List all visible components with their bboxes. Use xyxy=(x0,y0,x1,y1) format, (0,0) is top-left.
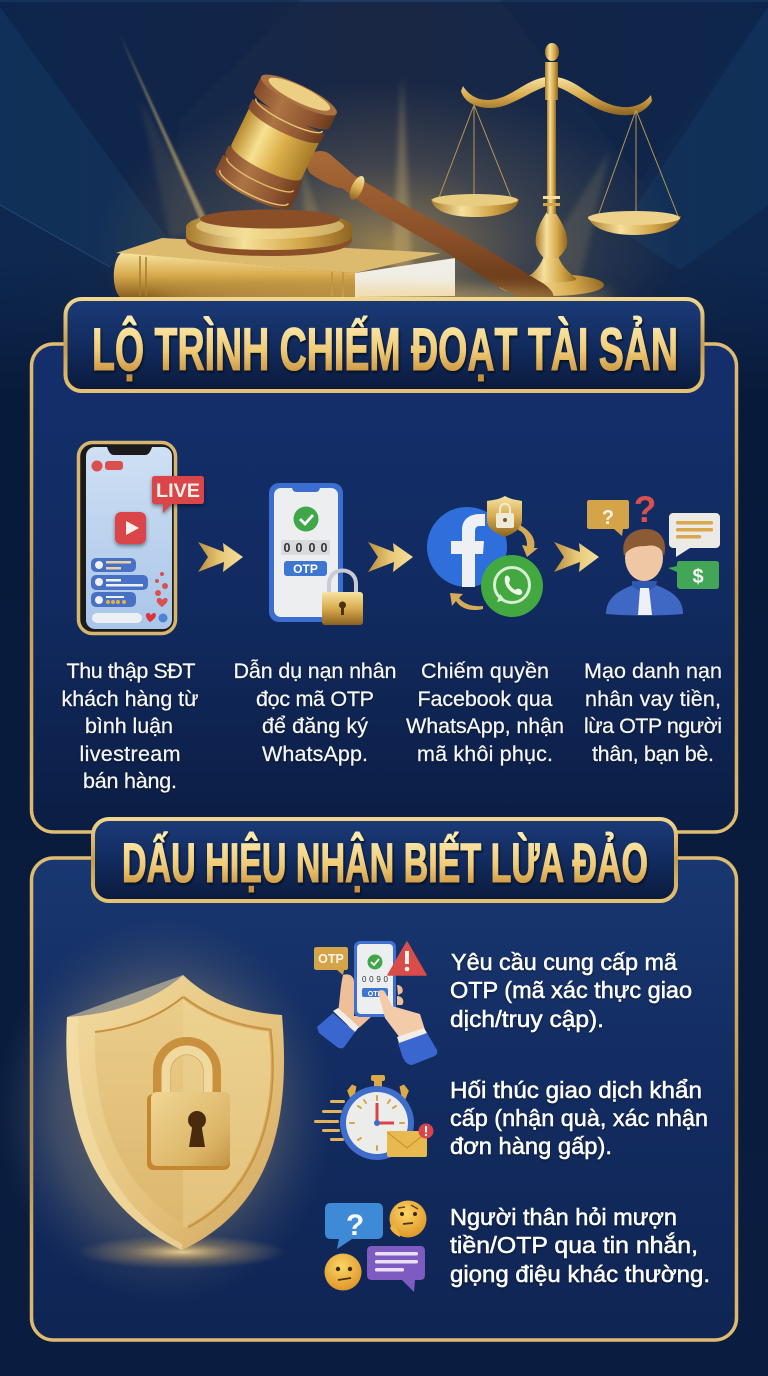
step 2 text: để đăng ký xyxy=(262,714,368,738)
heading banner: route xyxy=(66,288,702,391)
illustration: scales of justice xyxy=(431,43,681,296)
icon: OTP phone with padlock: 0 xyxy=(284,541,291,555)
gavel striker block xyxy=(186,210,352,256)
icon: hands holding OTP phone xyxy=(314,941,437,1065)
illustration: gavel xyxy=(186,68,553,297)
icon: hands holding OTP phone: 0 0 9 0 xyxy=(362,975,389,984)
step 3 text: Chiếm quyền xyxy=(421,659,549,683)
step 1 text xyxy=(62,659,198,793)
panel: route xyxy=(32,344,736,832)
heading banner: signs xyxy=(93,819,676,901)
icon: Facebook and WhatsApp takeover xyxy=(427,496,543,617)
icon: chat bubbles and emoji xyxy=(324,1200,426,1292)
text: relatives asking: Người thân hỏi mượn xyxy=(450,1204,677,1230)
gavel handle xyxy=(307,151,553,297)
arrow 1 xyxy=(198,542,243,572)
step 3 text xyxy=(406,659,564,766)
badge: LIVE xyxy=(152,476,204,513)
text: urgency: Hối thúc giao dịch khẩn xyxy=(450,1077,702,1103)
step 4 text: lừa OTP người xyxy=(584,714,722,738)
icon: chat bubbles and emoji: ? xyxy=(346,1209,364,1242)
step 1 text: Thu thập SĐT xyxy=(66,659,196,683)
step 1 text: livestream xyxy=(80,742,180,766)
step 3 text: mã khôi phục. xyxy=(417,742,553,766)
arrow 2 xyxy=(368,542,413,572)
text: OTP request xyxy=(450,949,692,1032)
text: relatives asking xyxy=(450,1204,710,1287)
icon: impersonation person with bubbles xyxy=(587,489,720,616)
icon: OTP phone with padlock: OTP xyxy=(293,562,318,576)
icon: red question mark: ? xyxy=(634,489,656,530)
step 3 text: WhatsApp, nhận xyxy=(406,714,564,738)
icon: warning triangle xyxy=(388,942,426,975)
step 1 text: khách hàng từ xyxy=(62,687,198,711)
panel: signs xyxy=(32,858,736,1340)
bubble: OTP: OTP xyxy=(318,952,344,966)
step 2 text xyxy=(234,658,396,766)
icon: hands holding OTP phone: OTP xyxy=(368,991,383,998)
text: OTP request: Yêu cầu cung cấp mã xyxy=(451,949,677,975)
bubble: message xyxy=(669,513,720,557)
icon: golden shield with padlock xyxy=(0,915,335,1305)
text: urgency: đơn hàng gấp). xyxy=(450,1133,612,1159)
step 2 text: đọc mã OTP xyxy=(256,687,374,711)
text: relatives asking: giọng điệu khác thường. xyxy=(450,1261,710,1287)
gavel head xyxy=(211,68,341,216)
badge: LIVE: LIVE xyxy=(156,481,200,502)
step 4 text: thân, bạn bè. xyxy=(592,742,714,766)
bubble: money: $ xyxy=(692,566,704,588)
step 4 text: nhân vay tiền, xyxy=(585,687,721,711)
step 4 text xyxy=(584,659,722,766)
step 2 text: WhatsApp. xyxy=(262,742,368,766)
step 1 text: bán hàng. xyxy=(83,769,177,793)
step 3 text: Facebook qua xyxy=(418,687,553,711)
illustration: book xyxy=(114,238,455,297)
icon: OTP phone with padlock xyxy=(269,483,363,625)
text: urgency xyxy=(450,1077,708,1159)
step 1 text: bình luận xyxy=(85,714,173,738)
icon: livestream phone xyxy=(78,442,204,634)
text: OTP request: OTP (mã xác thực giao xyxy=(450,977,692,1003)
icon: OTP phone with padlock: 0 xyxy=(309,541,316,555)
bubble: question: ? xyxy=(602,507,614,529)
text: relatives asking: tiền/OTP qua tin nhắn, xyxy=(450,1232,698,1258)
icon: OTP phone with padlock: 0 xyxy=(296,541,303,555)
padlock xyxy=(147,1046,230,1170)
step 2 text: Dẫn dụ nạn nhân xyxy=(234,658,396,683)
text: urgency: cấp (nhận quà, xác nhận xyxy=(450,1105,708,1131)
arrow 3 xyxy=(554,542,599,572)
icon: stopwatch with envelope xyxy=(314,1075,434,1160)
step 4 text: Mạo danh nạn xyxy=(584,659,722,683)
icon: OTP phone with padlock: 0 xyxy=(321,541,328,555)
text: OTP request: dịch/truy cập). xyxy=(450,1006,604,1032)
